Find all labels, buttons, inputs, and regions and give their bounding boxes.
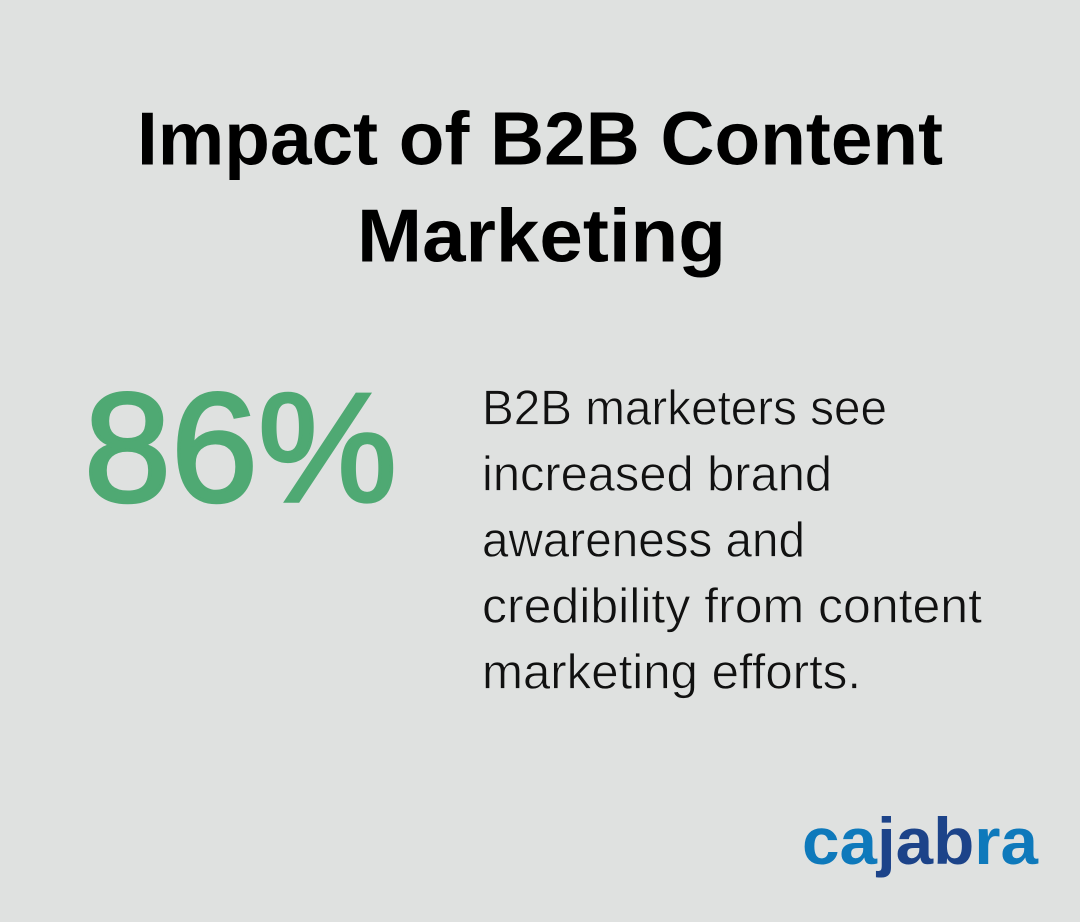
description text: awareness and [482, 514, 805, 568]
description text [482, 382, 982, 700]
description text: marketing efforts. [482, 646, 861, 700]
title: Impact of B2B Content [137, 96, 943, 180]
title: Marketing [357, 194, 726, 278]
description text: increased brand [482, 448, 832, 502]
statistic: 86%: 86% [84, 361, 397, 534]
description text: B2B marketers see [482, 382, 887, 436]
title [137, 96, 943, 278]
description text: credibility from content [482, 580, 982, 634]
logo: cajabra: cajabra [802, 804, 1039, 878]
